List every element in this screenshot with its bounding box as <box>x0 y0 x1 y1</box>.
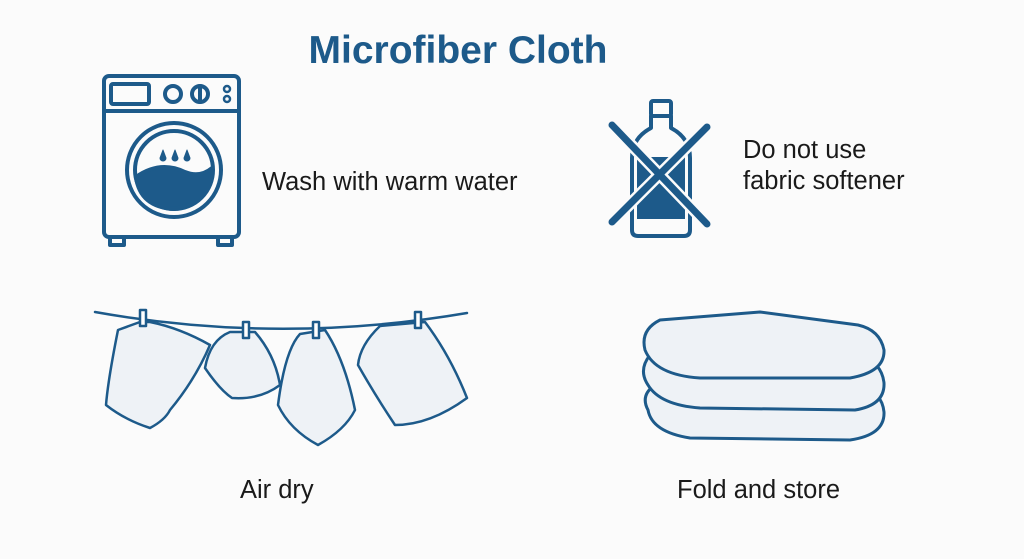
text: no softener: Do not use <box>743 136 866 164</box>
icon: washing machine <box>104 76 239 245</box>
text: fold and store: Fold and store <box>677 476 840 504</box>
title: Microfiber Cloth <box>308 29 608 72</box>
text: air dry: Air dry <box>240 476 314 504</box>
text: wash: Wash with warm water <box>262 168 518 196</box>
icon: clothesline <box>95 310 467 445</box>
icon: bottle crossed <box>612 101 707 236</box>
text: no softener: fabric softener <box>743 167 905 195</box>
text: no softener <box>743 136 905 195</box>
icon: folded towels <box>643 312 884 440</box>
